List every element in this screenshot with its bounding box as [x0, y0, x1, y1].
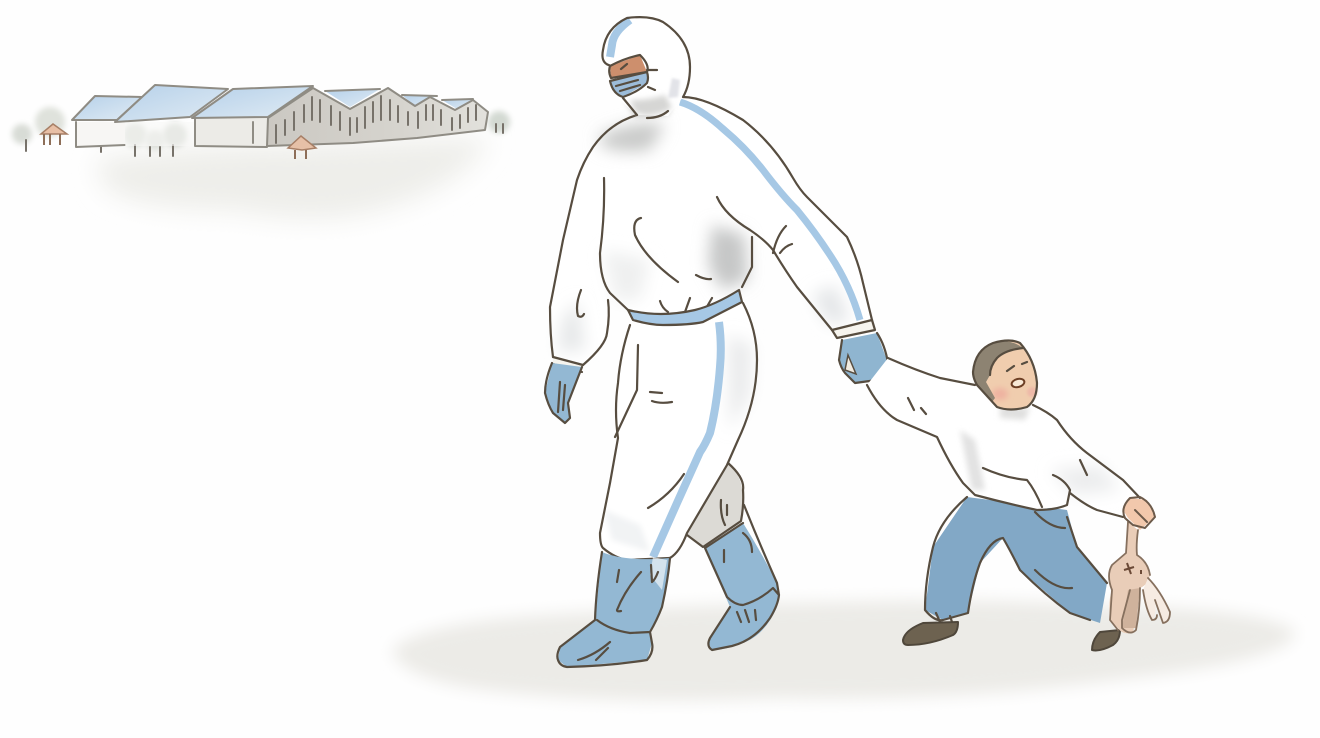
child shirt [867, 358, 1140, 517]
blue arm stripe [680, 102, 860, 320]
ground shadow [392, 601, 1296, 700]
suit outlines [683, 97, 872, 320]
toy rabbit [1109, 522, 1170, 633]
face and mask [609, 55, 657, 97]
waist belt [628, 290, 742, 325]
figure: child [867, 340, 1170, 650]
hood [602, 17, 690, 118]
back boot [705, 505, 779, 650]
blue leg stripe [653, 322, 721, 557]
scene: distant hospital buildings [12, 85, 510, 219]
suit shading [558, 92, 850, 552]
middle building [115, 85, 228, 146]
left building [72, 96, 142, 147]
suit wrinkles [577, 218, 792, 508]
child trousers [925, 497, 1107, 623]
left cuff and glove [545, 357, 583, 423]
child hand [1123, 497, 1155, 530]
front building [192, 86, 313, 147]
child shoes [903, 622, 1120, 650]
gabled roof wall [267, 88, 488, 146]
trees [12, 107, 510, 156]
right cuff and glove [832, 320, 888, 383]
figure: adult in protective suit [545, 17, 888, 667]
suit body [550, 17, 872, 560]
front boot [557, 552, 670, 667]
pavilions [41, 124, 316, 159]
child head [973, 340, 1037, 410]
back leg [687, 463, 743, 547]
building ground haze [95, 138, 490, 219]
